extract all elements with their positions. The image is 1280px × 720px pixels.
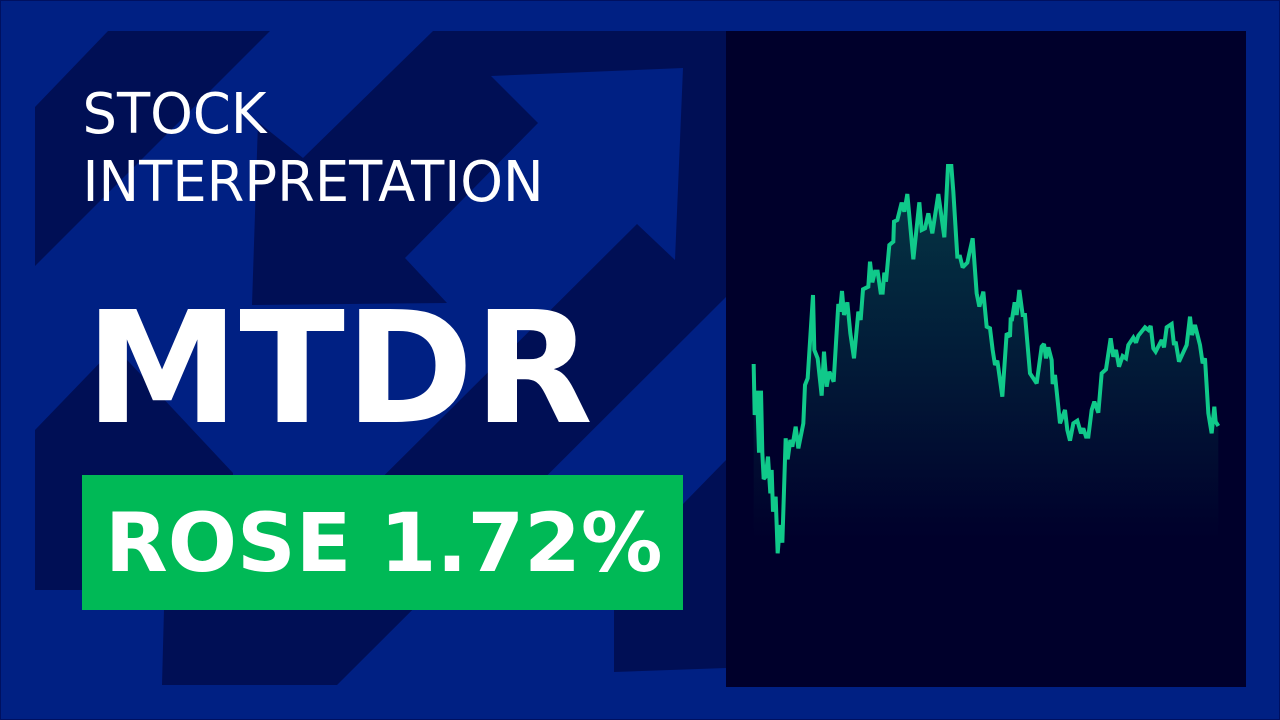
arrow shape: lower left: [35, 347, 233, 590]
area fill: [754, 166, 1218, 553]
price line: [754, 166, 1218, 553]
badge text: ROSE 1.72%: [105, 496, 663, 591]
ticker symbol: MTDR: [85, 278, 593, 459]
arrow shape: top left: [35, 31, 270, 266]
arrow shape: centre large: [162, 31, 726, 685]
title: INTERPRETATION: [82, 150, 544, 215]
badge: change: [82, 475, 683, 610]
arrow shape: lower right: [590, 460, 726, 672]
background arrows: [35, 31, 726, 685]
badge background: [82, 475, 683, 610]
panel: chart: [726, 31, 1246, 687]
title: [82, 82, 544, 215]
title: STOCK: [82, 82, 268, 147]
line chart: [754, 166, 1218, 553]
